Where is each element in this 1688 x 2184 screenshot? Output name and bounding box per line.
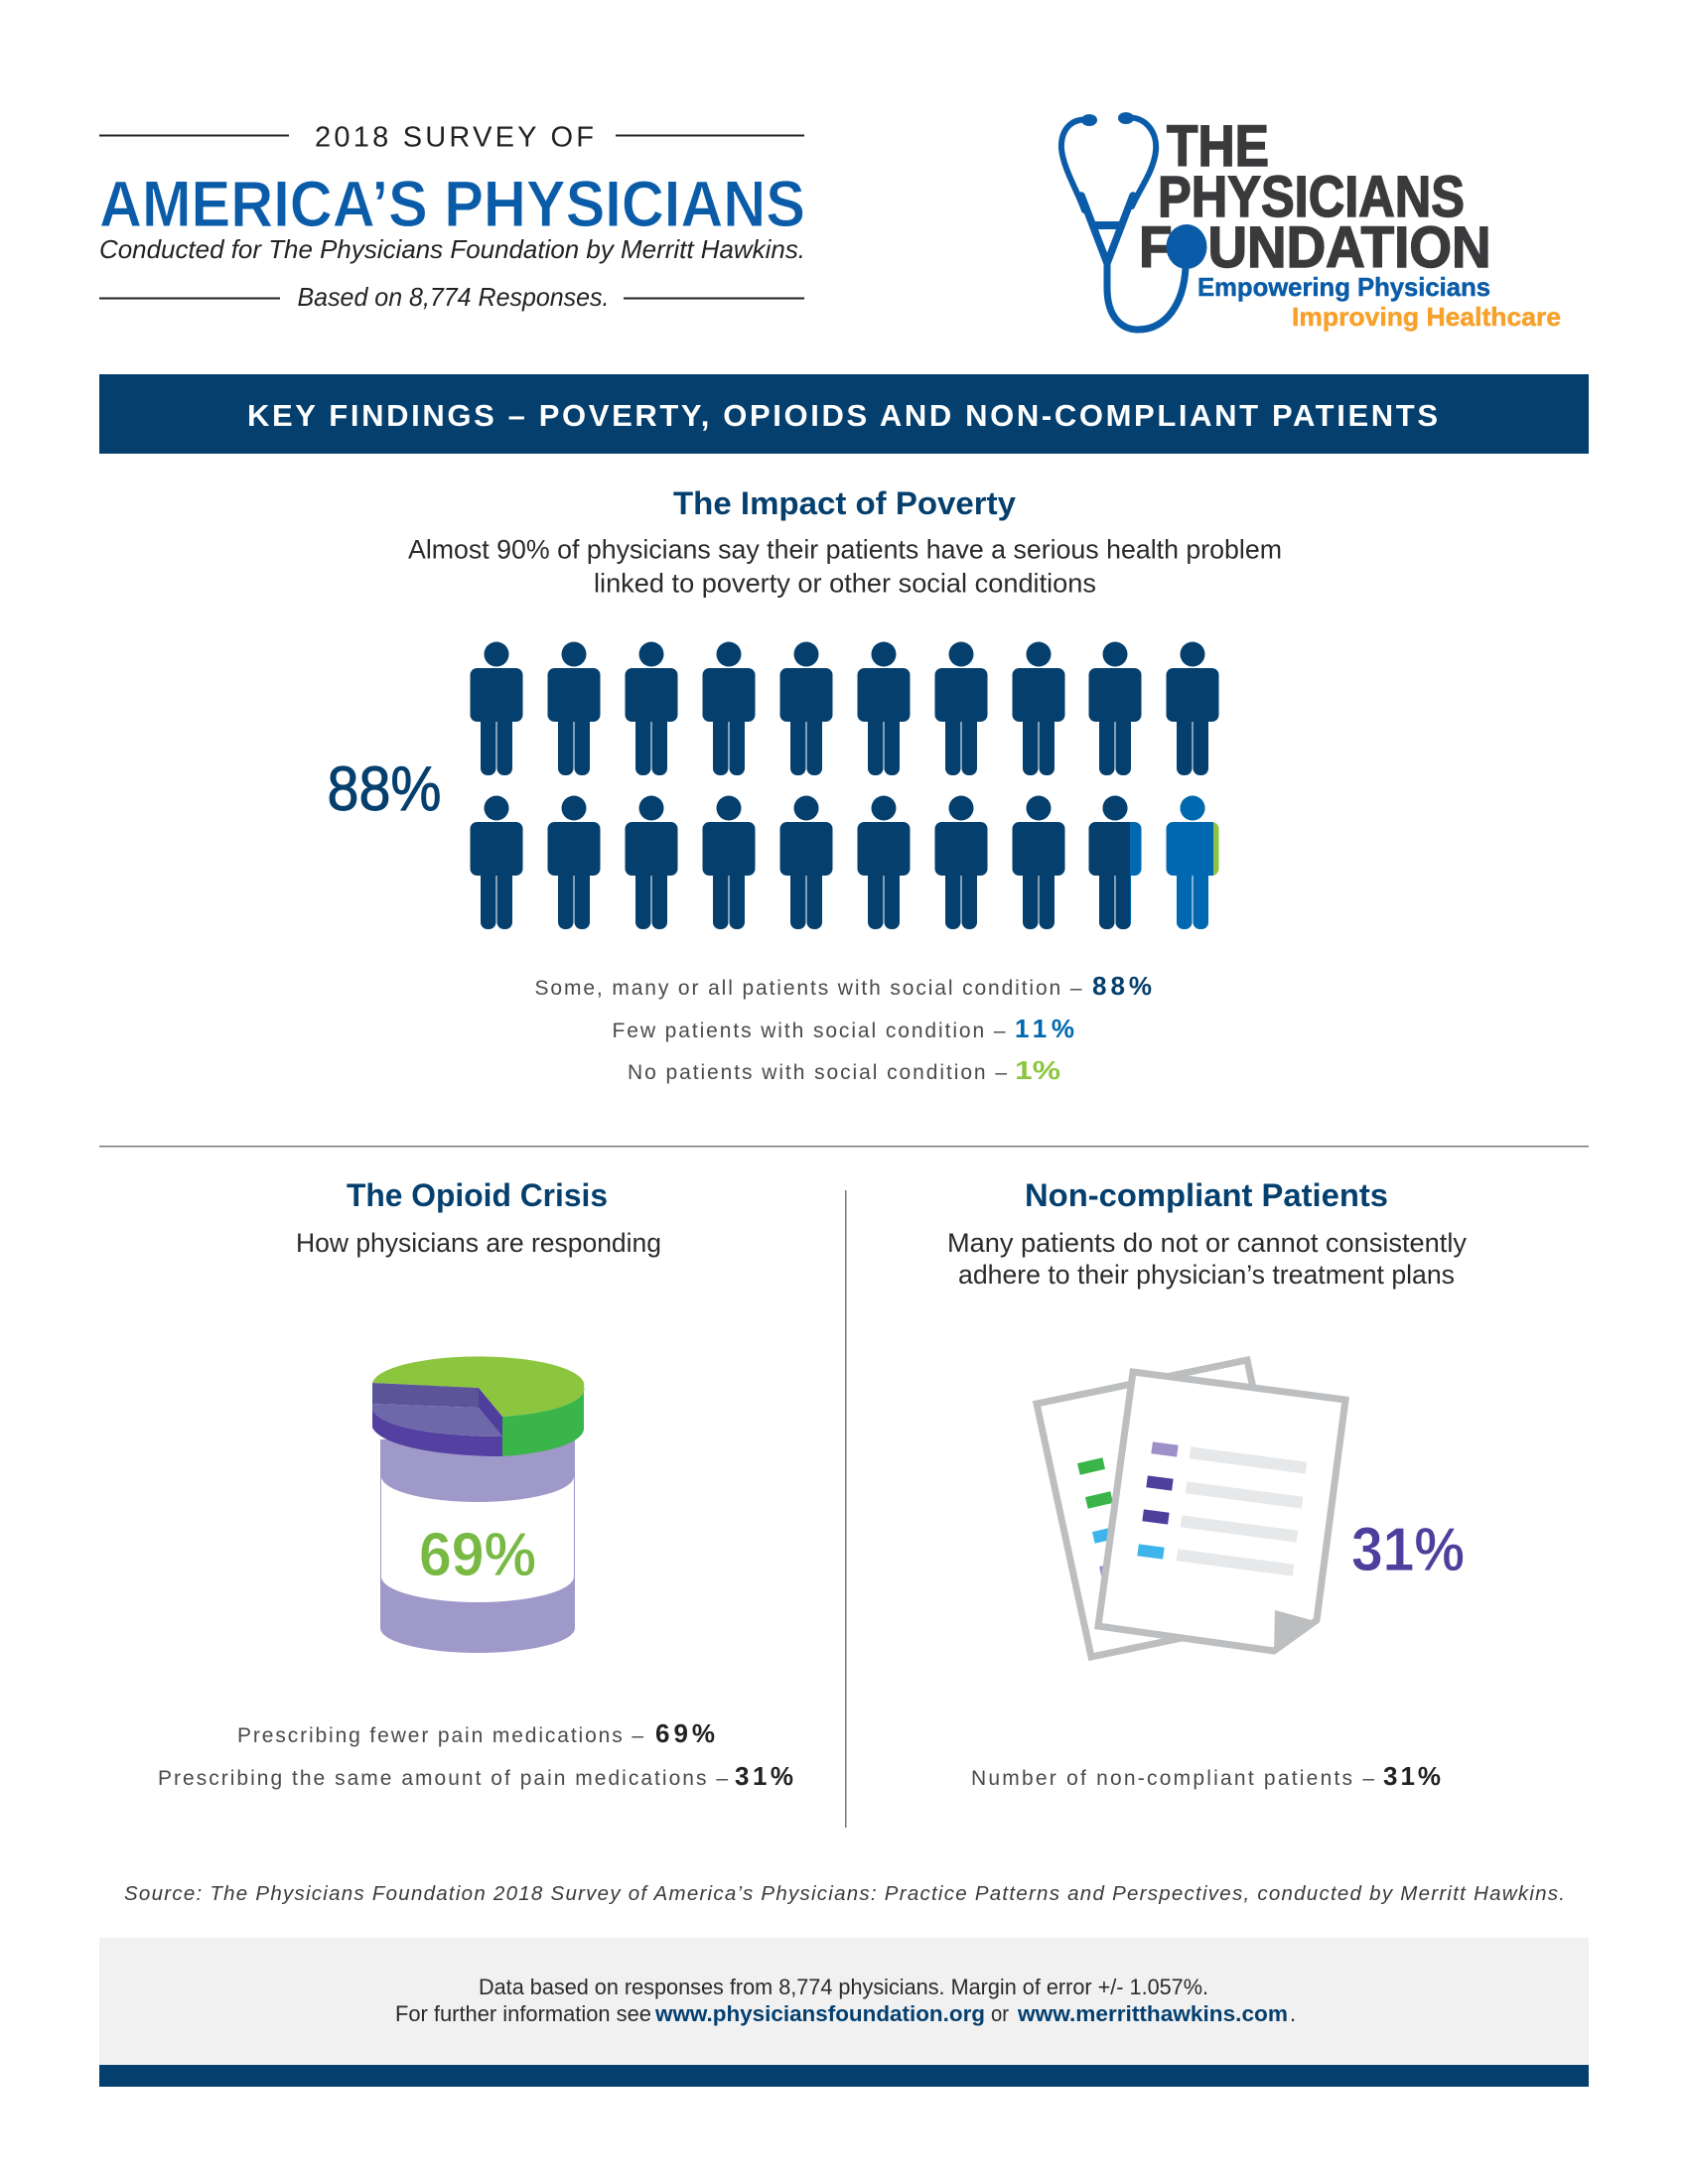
footer bar: [99, 2065, 1589, 2087]
legend values: 69%: [655, 1718, 715, 1748]
legend values: [1015, 971, 1152, 1085]
description: Many patients do not or cannot consistently: [947, 1228, 1467, 1258]
big stat: 88%: 88%: [328, 754, 441, 824]
icon: pill bottle with pie lid: [372, 1356, 584, 1653]
legend values: [655, 1718, 793, 1791]
further information line: .: [1290, 2001, 1296, 2026]
legend rows: [534, 977, 1082, 1084]
description: adhere to their physician’s treatment plans: [958, 1260, 1455, 1290]
logo wordmark: PHYSICIANS: [1158, 165, 1465, 229]
legend rows: Prescribing fewer pain medications –: [237, 1724, 643, 1747]
legend rows: [158, 1724, 728, 1790]
pictogram: people row two: [471, 796, 1219, 929]
footer panel: [99, 1938, 1589, 2087]
logo wordmark: [1139, 114, 1491, 279]
legend value: 31%: [1383, 1761, 1441, 1791]
survey year line: 2018 SURVEY OF: [315, 121, 594, 153]
description: Almost 90% of physicians say their patients have a serious health problem: [408, 534, 1282, 564]
margin of error note: Data based on responses from 8,774 physicians. Margin of error +/- 1.057%.: [479, 1975, 1208, 1999]
panel: impact of poverty: [328, 485, 1282, 1085]
banner: key findings: [99, 374, 1589, 454]
description: How physicians are responding: [296, 1228, 661, 1258]
heading: The Impact of Poverty: [673, 485, 1016, 521]
heading: The Opioid Crisis: [347, 1177, 608, 1213]
legend row: Number of non-compliant patients –: [971, 1767, 1374, 1790]
further information line: or: [991, 2001, 1009, 2026]
source note: Source: The Physicians Foundation 2018 Survey of America’s Physicians: Practice Patterns and Perspectives, conducted by Merritt Hawkins.: [124, 1882, 1565, 1905]
description: [408, 534, 1282, 598]
big stat: 31%: 31%: [1351, 1516, 1465, 1584]
header: survey title block: [99, 121, 805, 312]
banner: key findings: KEY FINDINGS – POVERTY, OPIOIDS AND NON-COMPLIANT PATIENTS: [247, 398, 1438, 433]
logo tagline: empowering: Empowering Physicians: [1197, 272, 1490, 302]
logo wordmark: FOUNDATION: [1139, 215, 1491, 279]
legend rows: No patients with social condition –: [628, 1061, 1007, 1084]
legend values: 31%: [735, 1761, 793, 1791]
legend values: 88%: [1092, 971, 1152, 1001]
icon: stethoscope chest piece: [1166, 224, 1207, 269]
description: linked to poverty or other social conditions: [594, 568, 1096, 598]
further information line: www.merritthawkins.com: [1017, 2001, 1288, 2026]
panel: non-compliant patients: [947, 1177, 1467, 1791]
legend rows: Some, many or all patients with social condition –: [534, 977, 1082, 1000]
legend rows: Prescribing the same amount of pain medications –: [158, 1767, 728, 1790]
further information line: [395, 2001, 1296, 2026]
panel: opioid crisis: [158, 1177, 793, 1791]
further information line: For further information see: [395, 2001, 651, 2026]
heading: Non-compliant Patients: [1025, 1177, 1388, 1213]
legend values: 11%: [1015, 1014, 1074, 1043]
main title: AMERICA’S PHYSICIANS: [99, 167, 805, 240]
logo wordmark: THE: [1167, 114, 1269, 179]
icon: paper documents: [1037, 1360, 1345, 1657]
logo tagline: improving: Improving Healthcare: [1292, 302, 1561, 332]
legend values: 1%: [1015, 1055, 1060, 1085]
infographic canvas: [99, 112, 1589, 2087]
conducted-by line: Conducted for The Physicians Foundation by Merritt Hawkins.: [99, 234, 805, 264]
legend rows: Few patients with social condition –: [612, 1020, 1006, 1042]
stat on label: 69%: 69%: [419, 1521, 536, 1589]
icon: stethoscope: [1061, 115, 1186, 330]
logo: The Physicians Foundation: [1061, 114, 1561, 332]
pictogram: people row one: [471, 641, 1219, 775]
further information line: www.physiciansfoundation.org: [654, 2001, 985, 2026]
description: [947, 1228, 1467, 1290]
responses line: Based on 8,774 Responses.: [298, 282, 610, 312]
